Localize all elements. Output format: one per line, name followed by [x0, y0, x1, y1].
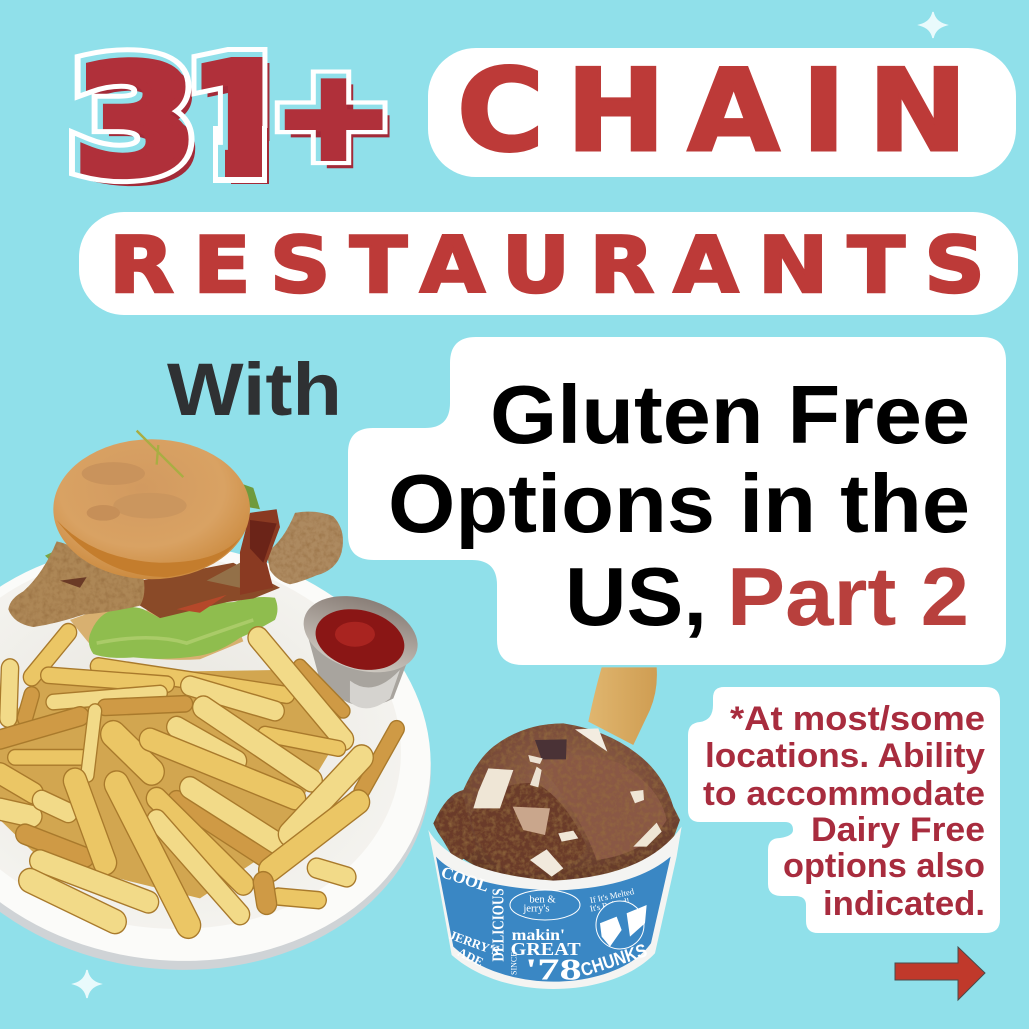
- wooden spoon: [588, 667, 657, 745]
- ketchup cup: [296, 584, 426, 708]
- heading: 31+: 1: [188, 30, 296, 211]
- panel: Gluten Free Options heading: Part 2: [727, 550, 969, 643]
- panel: dairy free note: to accommodate: [703, 775, 985, 813]
- panel: dairy free note: [688, 687, 1000, 933]
- panel: dairy free note: *At most/some: [730, 700, 985, 738]
- heading: 31+: +: [286, 38, 394, 212]
- heading: 31+: 3: [70, 31, 196, 207]
- panel: Gluten Free Options heading: US,: [565, 550, 707, 643]
- arrow: [895, 947, 985, 1000]
- heading: 31+: 3: [73, 34, 199, 210]
- cup lettering: GREAT: [511, 939, 581, 959]
- panel: dairy free note: locations. Ability: [705, 737, 985, 775]
- cup lettering: If It's Melted: [589, 886, 636, 905]
- heading: 31+: 3: [79, 40, 205, 216]
- cup lettering: JERRY'S: [447, 928, 501, 959]
- panel: Gluten Free Options heading: Gluten Free: [490, 368, 970, 461]
- heading: 31+: 1: [194, 36, 302, 217]
- chocolate chunks: [473, 728, 662, 877]
- cup lettering: ben &: [529, 895, 556, 906]
- scoop of chocolate ice cream: [433, 723, 680, 881]
- fries: [0, 632, 397, 925]
- plate: [0, 514, 456, 999]
- cup lettering: '78: [525, 952, 582, 986]
- panel: Gluten Free Options heading: [348, 337, 1006, 665]
- heading: 31+: [69, 47, 390, 186]
- heading pill: RESTAURANTS: RESTAURANTS: [109, 221, 985, 311]
- burger: [8, 431, 343, 660]
- cup lettering: COOL: [439, 862, 491, 896]
- cup lettering: ADE: [455, 945, 486, 969]
- panel: dairy free note: indicated.: [823, 885, 985, 923]
- heading: 31+: +: [277, 29, 385, 203]
- panel: Gluten Free Options heading: Options in the: [388, 457, 970, 550]
- cup lettering: SINCE: [510, 952, 519, 975]
- heading: 31+: 1: [185, 27, 293, 208]
- cup lettering: makin': [512, 927, 565, 944]
- photo: ice cream cup: [428, 667, 682, 989]
- cup lettering: [439, 862, 650, 986]
- cup lettering: jerry's: [522, 904, 550, 915]
- icon: sparkle top right: [920, 12, 946, 38]
- heading: 31+: +: [280, 32, 388, 206]
- panel: dairy free note: options also: [783, 847, 985, 885]
- text: With: With: [167, 348, 342, 431]
- heading pill: CHAIN: CHAIN: [457, 46, 967, 177]
- paper cup: [428, 827, 682, 989]
- cup lettering: DELICIOUS: [488, 888, 507, 962]
- cup lettering: It's Ruined!: [589, 895, 630, 914]
- panel: dairy free note: Dairy Free: [811, 811, 985, 849]
- photo: plate with burger and fries: [0, 431, 456, 999]
- cup lettering: CHUNKS: [578, 939, 650, 980]
- icon: sparkle bottom left: [74, 970, 100, 998]
- globe: [596, 901, 644, 949]
